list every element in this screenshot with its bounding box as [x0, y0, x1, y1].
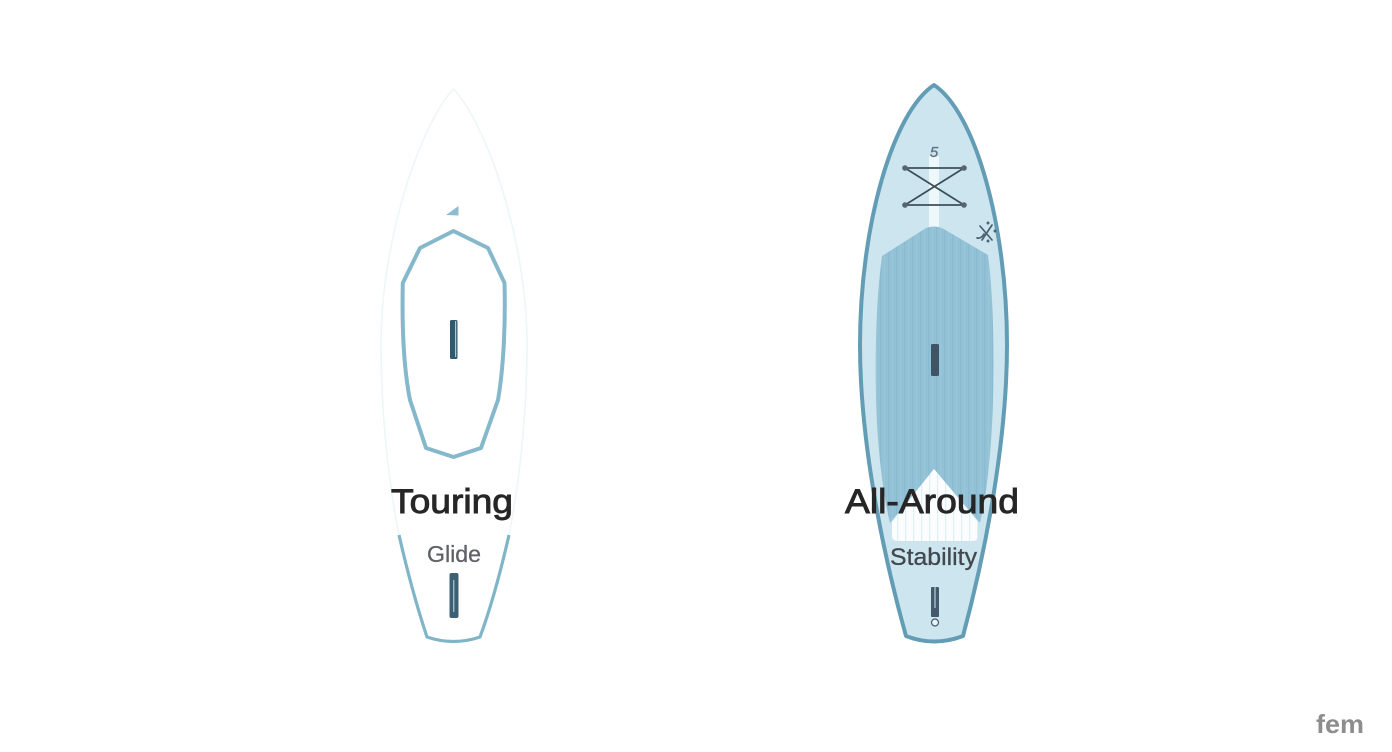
touring board faint outline: [381, 89, 527, 535]
touring board tail outline: [399, 535, 509, 642]
icon: crossed paddle logo: [977, 222, 996, 242]
touring subtitle: Glide: [427, 541, 481, 567]
all-around title: All-Around: [845, 483, 1019, 521]
touring center handle: [450, 320, 458, 359]
all-around subtitle: Stability: [890, 544, 977, 571]
panel: touring board: [381, 89, 527, 642]
all-around center handle: [931, 344, 939, 376]
all-around deck pad: [876, 226, 993, 523]
watermark logo: fem: [1316, 709, 1364, 739]
all-around tail pad: [892, 469, 978, 541]
leash plug: [931, 587, 939, 626]
touring deck pad outline: [403, 231, 505, 457]
touring tail handle: [450, 573, 458, 618]
model number: 5: [930, 144, 939, 161]
touring nose triangle marker: [446, 206, 458, 216]
touring title: Touring: [391, 483, 513, 521]
center white strip: [929, 156, 939, 228]
bungee lacing: [902, 165, 967, 208]
all-around board body: [860, 85, 1007, 642]
panel: all-around board: [845, 85, 1019, 642]
